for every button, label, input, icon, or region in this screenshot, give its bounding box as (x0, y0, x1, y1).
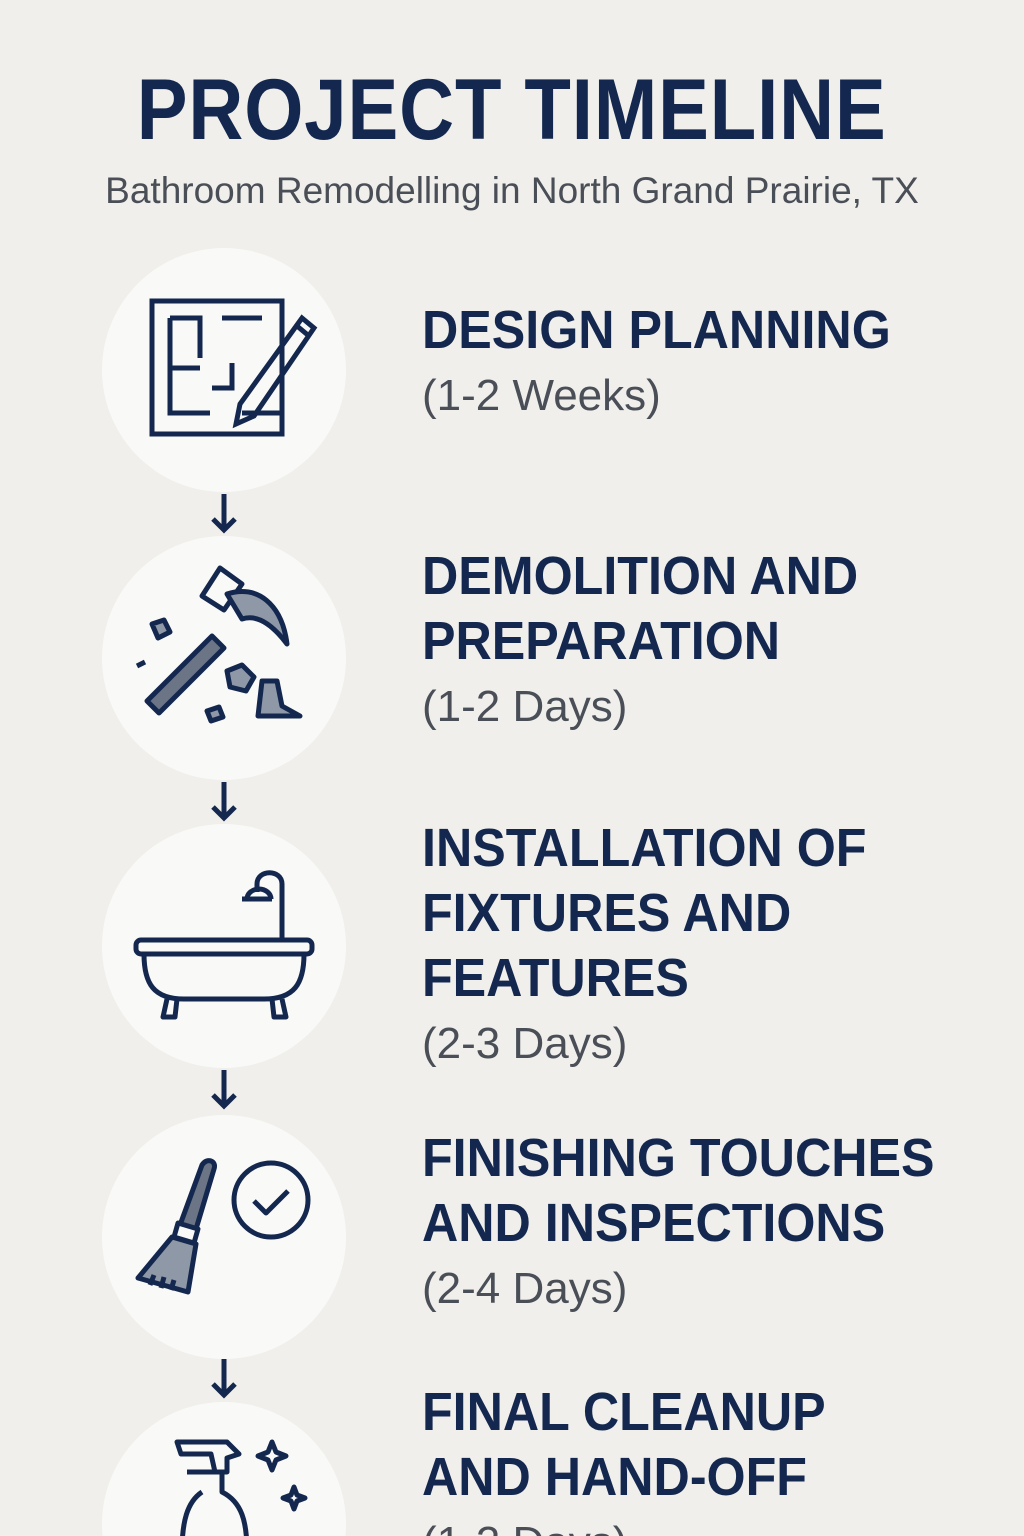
step 5 text: AND HAND-OFF (422, 1447, 807, 1507)
step 4 text (422, 1128, 934, 1313)
subtitle: Bathroom Remodelling in North Grand Prairie, TX (105, 170, 919, 211)
circle 4: brush and check icon (102, 1115, 346, 1359)
circle 5: spray bottle icon (102, 1402, 346, 1536)
step 5 text (422, 1382, 826, 1536)
step 3 text: FIXTURES AND (422, 883, 791, 943)
step 2 text: (1-2 Days) (422, 682, 627, 731)
step 3 text (422, 818, 866, 1068)
arrow 4 (211, 1359, 237, 1398)
step 3 text: (2-3 Days) (422, 1019, 627, 1068)
step 2 text: DEMOLITION AND (422, 546, 858, 606)
step 4 text: (2-4 Days) (422, 1264, 627, 1313)
circle 2: demolition icon (102, 536, 346, 780)
step 1 text (422, 300, 891, 420)
step 2 text: PREPARATION (422, 611, 780, 671)
step 1 text: DESIGN PLANNING (422, 300, 891, 360)
step 3 text: INSTALLATION OF (422, 818, 866, 878)
arrow 2 (211, 782, 237, 822)
step 4 text: AND INSPECTIONS (422, 1193, 885, 1253)
step 5 text: FINAL CLEANUP (422, 1382, 826, 1442)
step 4 text: FINISHING TOUCHES (422, 1128, 934, 1188)
circle 1: design icon (102, 248, 346, 492)
step 1 text: (1-2 Weeks) (422, 371, 661, 420)
circle 3: bathtub icon (102, 824, 346, 1068)
arrow 1 (211, 494, 237, 534)
arrow 3 (211, 1070, 237, 1110)
step 3 text: FEATURES (422, 948, 689, 1008)
step 2 text (422, 546, 858, 731)
title: PROJECT TIMELINE (137, 62, 887, 158)
